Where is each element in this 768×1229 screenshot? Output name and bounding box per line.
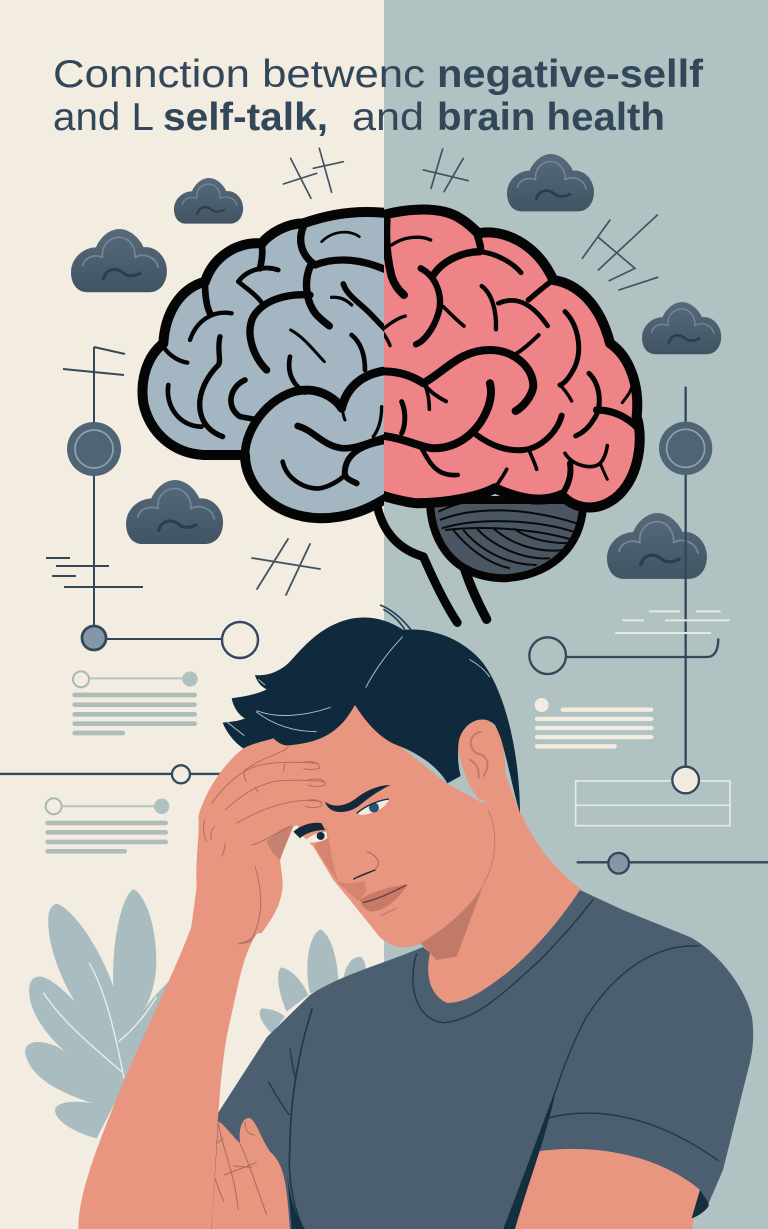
ear <box>458 719 505 801</box>
title: Connction betwenc <box>53 53 425 96</box>
nose line <box>353 852 378 879</box>
icon: cloud top left small <box>174 178 243 224</box>
icon: cloud top right <box>507 154 594 211</box>
title: and <box>352 96 424 139</box>
text list placeholder C <box>535 698 651 746</box>
scribble marks top left <box>283 148 343 198</box>
right eye <box>357 799 389 815</box>
scribble marks top centre <box>423 149 468 192</box>
title: negative-sellf <box>437 53 704 96</box>
brain <box>142 210 640 623</box>
right hemisphere <box>373 210 640 507</box>
shirt folds <box>268 1008 312 1229</box>
bottom connector right <box>577 853 768 874</box>
raised hand <box>190 738 326 944</box>
icon: cloud top left large <box>71 229 167 292</box>
background: left cream panel <box>0 0 384 1229</box>
scribble marks top right <box>582 215 658 290</box>
text list placeholder B <box>46 798 169 851</box>
t-shirt <box>205 890 753 1229</box>
title <box>53 53 704 139</box>
face side shadow <box>315 827 338 882</box>
jaw line <box>484 810 495 883</box>
cream dashes right <box>615 611 730 633</box>
mouth <box>360 884 408 912</box>
icon: cloud mid right <box>642 302 721 354</box>
right node diagram <box>529 387 718 767</box>
left eyebrow <box>293 823 325 838</box>
title: and L <box>53 96 154 139</box>
forearm <box>78 877 282 1229</box>
face <box>273 705 523 960</box>
shadow under nose <box>337 881 367 902</box>
title: brain health <box>437 96 665 139</box>
right arm <box>503 1087 709 1229</box>
plant left <box>25 889 173 1138</box>
left hemisphere <box>142 212 393 518</box>
plant right <box>260 929 367 1033</box>
neck <box>425 805 582 1010</box>
hair <box>223 605 520 813</box>
outlined box right <box>576 781 730 826</box>
icon: cloud mid left <box>126 480 223 544</box>
horizontal connector left <box>0 765 227 783</box>
left eye <box>303 832 327 843</box>
cerebellum <box>430 497 583 578</box>
person <box>78 605 753 1229</box>
text list placeholder A <box>73 671 198 733</box>
icon: cloud lower right <box>607 513 707 579</box>
brain stem <box>377 507 487 623</box>
title: self-talk, <box>163 96 328 139</box>
left node diagram <box>46 347 258 658</box>
scribble marks lower left <box>252 539 320 595</box>
node on box <box>672 767 699 793</box>
right eyebrow <box>325 785 391 812</box>
shirt details <box>413 899 718 1161</box>
lower hand <box>212 1118 290 1229</box>
jaw shadow <box>421 883 484 960</box>
background: right blue-grey panel <box>384 0 768 1229</box>
